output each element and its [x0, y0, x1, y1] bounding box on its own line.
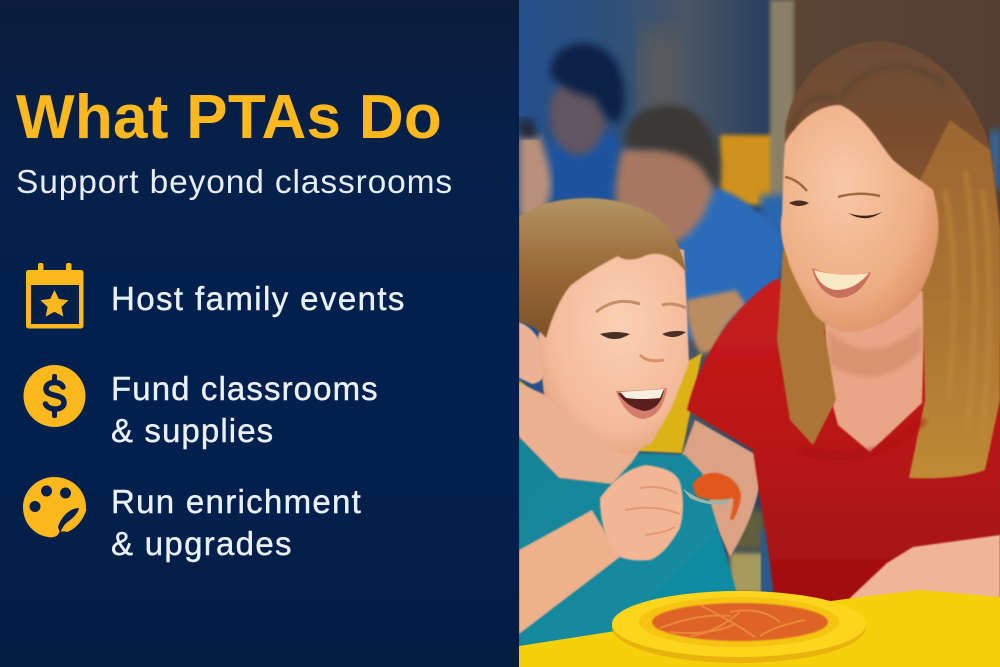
spoon and spaghetti	[682, 473, 741, 520]
woman face details	[785, 177, 882, 298]
left background child	[519, 118, 551, 217]
hair strand front right	[909, 120, 1000, 478]
text: host family events: Host family events	[111, 280, 406, 317]
text: run enrichment and upgrades	[111, 483, 362, 562]
hair strands right	[944, 170, 991, 354]
spaghetti	[652, 603, 828, 641]
plate	[612, 591, 866, 663]
table with plate	[519, 590, 1000, 667]
text: run enrichment and upgrades: & upgrades	[111, 525, 293, 562]
teal shirt	[519, 437, 736, 650]
text: run enrichment and upgrades: Run enrichment	[111, 483, 362, 520]
boy arm	[519, 510, 620, 634]
text: fund classrooms and supplies	[111, 370, 379, 450]
figure: boy in teal shirt	[519, 198, 741, 650]
red shirt	[687, 278, 1000, 610]
background: blurred cafeteria	[519, 0, 1000, 667]
boy neck	[519, 383, 640, 484]
woman right arm	[849, 534, 1000, 598]
boy face	[538, 235, 689, 455]
icon: dollar coin	[24, 365, 86, 427]
figure: woman in red shirt	[682, 41, 1000, 610]
panel: left navy text panel	[0, 0, 519, 667]
text: fund classrooms and supplies: Fund classrooms	[111, 370, 379, 407]
man in blue shirt	[616, 105, 780, 354]
boy hair	[519, 198, 686, 338]
left arm	[682, 420, 761, 557]
boy ear	[519, 322, 546, 384]
woman hair back	[781, 41, 1000, 340]
yellow chair behind boy	[519, 353, 702, 453]
icon: calendar with star	[26, 263, 84, 328]
title: What PTAs Do	[16, 83, 442, 152]
back person	[548, 43, 625, 200]
text: fund classrooms and supplies: & supplies	[111, 412, 274, 449]
hair strand front left	[777, 250, 836, 445]
boy hand	[600, 465, 683, 560]
face	[781, 105, 938, 332]
subtitle: Support beyond classrooms	[16, 164, 453, 201]
boy face details	[596, 301, 686, 419]
neck and chest	[825, 290, 925, 452]
icon: paint palette	[23, 477, 86, 538]
photo: parent and child eating spaghetti	[519, 0, 1000, 667]
